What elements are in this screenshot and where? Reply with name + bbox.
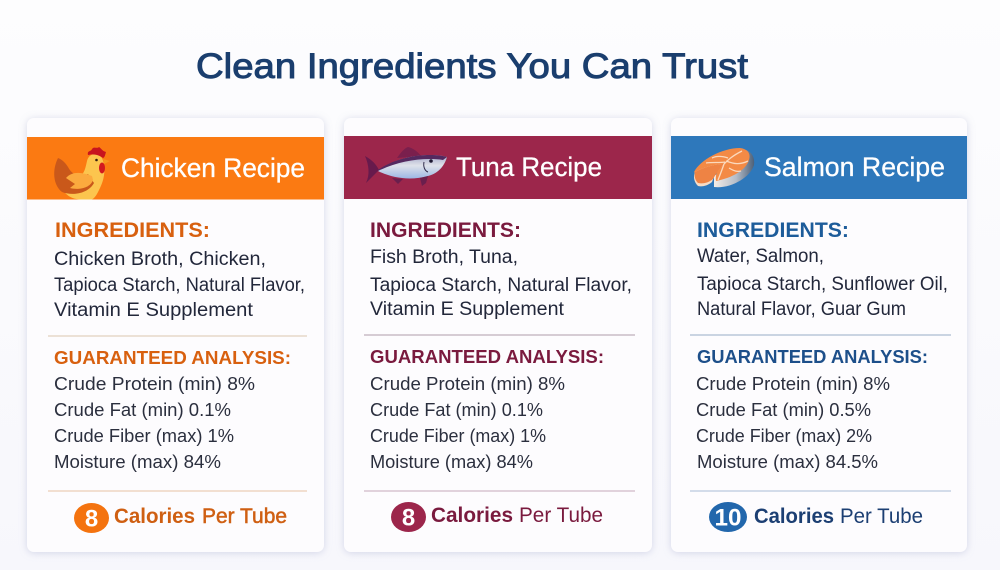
- panel: salmon recipe: [671, 118, 967, 552]
- analysis values: [696, 373, 890, 472]
- analysis values: [54, 373, 255, 472]
- panel: chicken recipe: [27, 118, 324, 552]
- calories label: Per Tube: [519, 504, 603, 527]
- icon: salmon steak: [694, 148, 754, 187]
- analysis values: Moisture (max) 84.5%: [697, 451, 878, 472]
- analysis values: Crude Protein (min) 8%: [696, 373, 890, 394]
- analysis values: Moisture (max) 84%: [370, 451, 533, 472]
- card background: [344, 118, 652, 552]
- calories label: Calories: [114, 505, 195, 528]
- header band: [27, 137, 324, 200]
- header title: Chicken Recipe: [121, 153, 305, 183]
- ingredients list: Natural Flavor, Guar Gum: [697, 299, 906, 320]
- analysis values: Crude Protein (min) 8%: [370, 373, 565, 394]
- guaranteed analysis heading: GUARANTEED ANALYSIS:: [697, 347, 928, 367]
- header band: [671, 136, 967, 199]
- ingredients list: Tapioca Starch, Sunflower Oil,: [697, 274, 948, 295]
- guaranteed analysis heading: GUARANTEED ANALYSIS:: [370, 347, 604, 367]
- calories label: [431, 504, 603, 527]
- ingredients list: [54, 249, 305, 321]
- ingredients list: [370, 247, 632, 320]
- calories badge: 10: [714, 504, 742, 532]
- ingredients list: [697, 246, 948, 320]
- calories badge: 8: [85, 506, 98, 532]
- header title: Tuna Recipe: [456, 152, 602, 182]
- calories label: [754, 505, 923, 528]
- analysis values: Crude Fat (min) 0.1%: [54, 399, 231, 420]
- panel: tuna recipe: [344, 118, 652, 552]
- calories label: Calories: [754, 505, 834, 528]
- ingredients heading: INGREDIENTS:: [697, 219, 849, 242]
- calories badge: [74, 503, 109, 533]
- analysis values: Crude Protein (min) 8%: [54, 373, 255, 394]
- calories label: [114, 505, 287, 528]
- calories label: Per Tube: [840, 505, 923, 528]
- analysis values: [370, 373, 565, 472]
- ingredients list: Vitamin E Supplement: [370, 299, 565, 320]
- calories badge: 8: [402, 504, 415, 532]
- icon: tuna: [365, 147, 447, 186]
- header title: Salmon Recipe: [764, 152, 945, 182]
- ingredients heading: INGREDIENTS:: [55, 219, 210, 242]
- header band: [344, 136, 652, 199]
- calories badge: [709, 502, 747, 532]
- analysis values: Crude Fiber (max) 1%: [54, 425, 234, 446]
- card background: [671, 118, 967, 552]
- calories label: Calories: [431, 504, 513, 527]
- ingredients list: Tapioca Starch, Natural Flavor,: [54, 275, 305, 296]
- ingredients heading: INGREDIENTS:: [370, 219, 521, 242]
- ingredients list: Chicken Broth, Chicken,: [54, 249, 266, 270]
- icon: chicken: [54, 147, 110, 200]
- ingredients list: Fish Broth, Tuna,: [370, 247, 518, 268]
- ingredients list: Water, Salmon,: [697, 246, 824, 267]
- calories badge: [391, 502, 426, 532]
- ingredients list: Tapioca Starch, Natural Flavor,: [370, 275, 632, 296]
- analysis values: Moisture (max) 84%: [54, 451, 221, 472]
- analysis values: Crude Fat (min) 0.1%: [370, 399, 543, 420]
- calories label: Per Tube: [202, 505, 287, 528]
- guaranteed analysis heading: GUARANTEED ANALYSIS:: [54, 348, 291, 368]
- analysis values: Crude Fiber (max) 1%: [370, 425, 546, 446]
- analysis values: Crude Fiber (max) 2%: [696, 425, 872, 446]
- title: Clean Ingredients You Can Trust: [196, 46, 748, 86]
- card background: [27, 118, 324, 552]
- analysis values: Crude Fat (min) 0.5%: [696, 399, 871, 420]
- ingredients list: Vitamin E Supplement: [54, 300, 254, 321]
